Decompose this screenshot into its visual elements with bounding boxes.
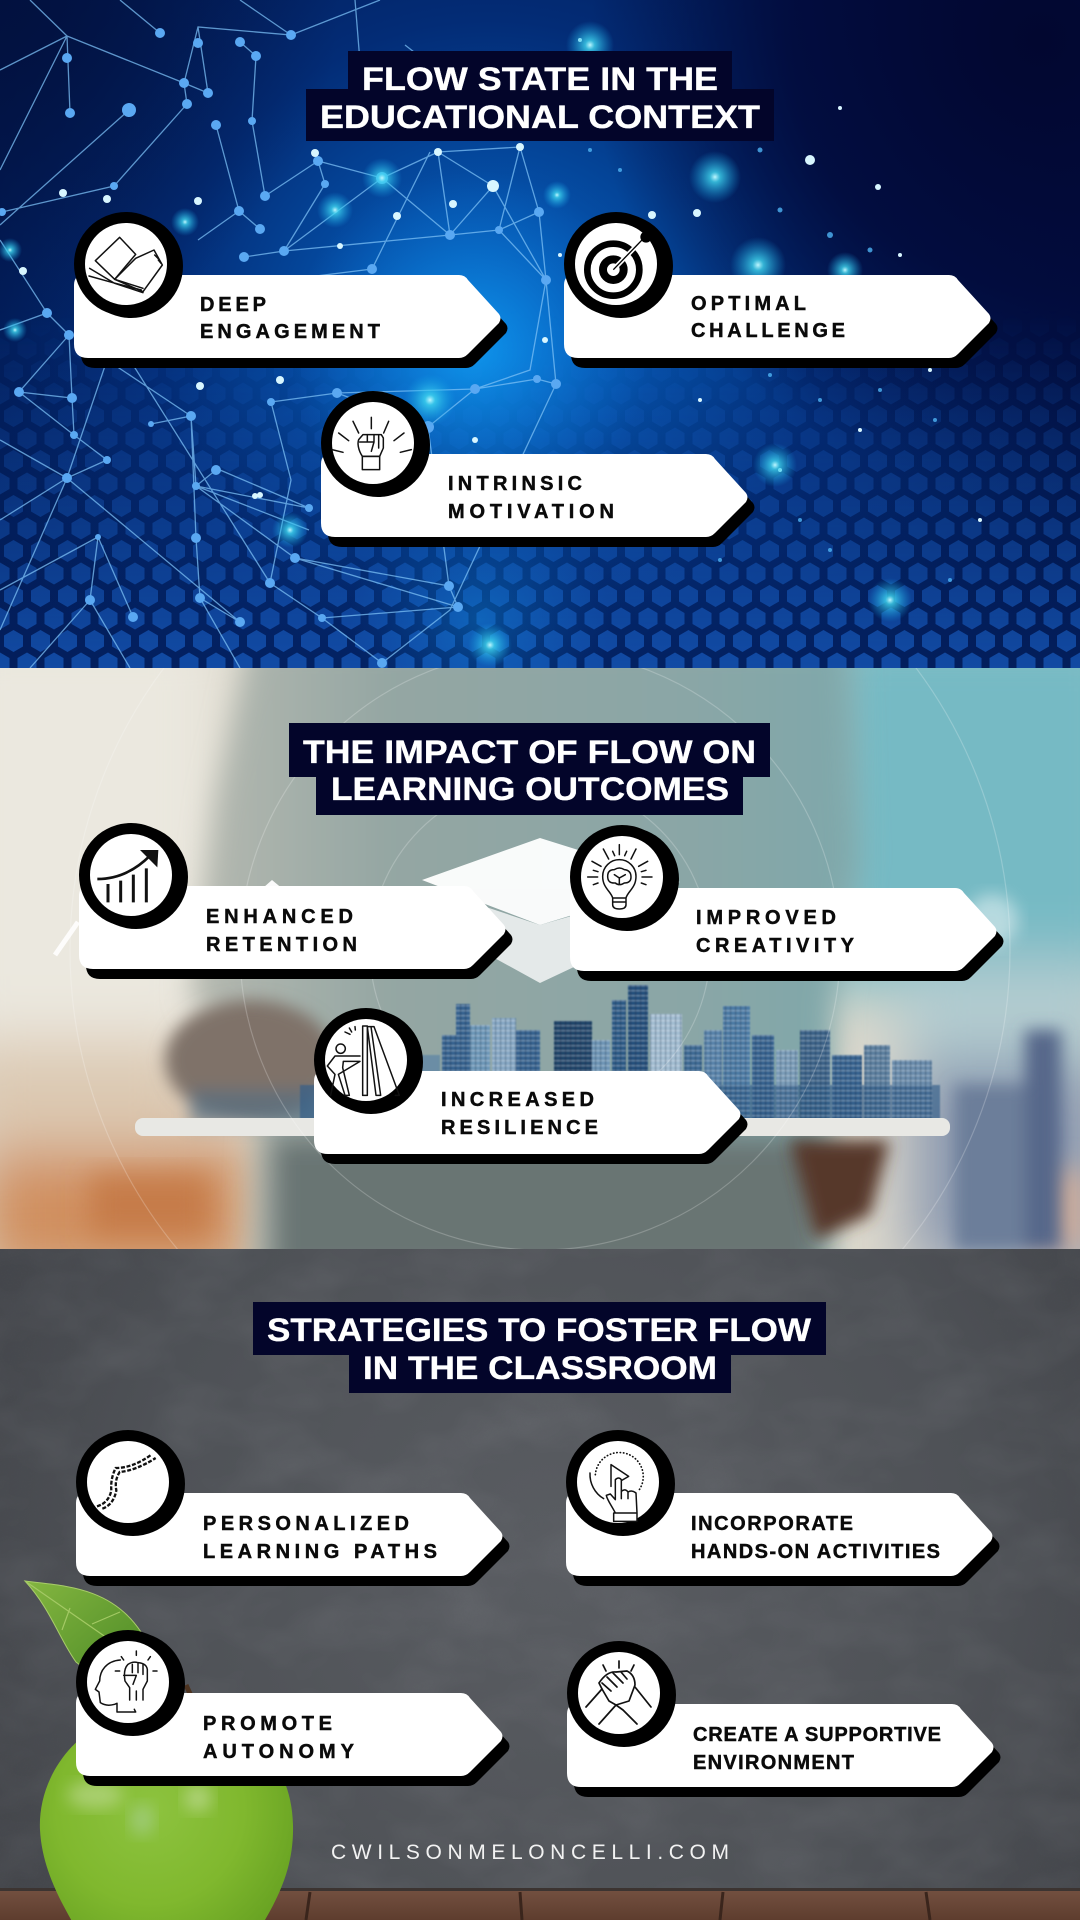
icon: hand tapping play button	[590, 1453, 643, 1521]
label	[691, 1513, 940, 1563]
icon: book	[89, 237, 162, 293]
label: LEARNING PATHS	[203, 1541, 437, 1563]
label: INTRINSIC	[448, 473, 582, 495]
icon: clasped hands	[586, 1661, 651, 1724]
title: strategies: STRATEGIES TO FOSTER FLOW	[267, 1312, 812, 1348]
label: ENVIRONMENT	[693, 1752, 854, 1774]
label	[693, 1724, 941, 1774]
label: PROMOTE	[203, 1713, 332, 1735]
label: RETENTION	[206, 934, 357, 956]
label: IMPROVED	[696, 907, 836, 929]
panel: flow state background	[0, 0, 1080, 668]
label: INCORPORATE	[691, 1513, 853, 1535]
card: deep engagement	[74, 212, 508, 368]
card: optimal challenge	[564, 212, 998, 368]
panel: impact of flow background	[0, 668, 1080, 1249]
card: increased resilience	[314, 1008, 748, 1164]
city skyline	[300, 985, 940, 1125]
card: promote autonomy	[76, 1630, 510, 1786]
icon: light bulb with brain	[588, 845, 652, 909]
card: supportive environment	[567, 1641, 1000, 1797]
wood shelf	[0, 1888, 1080, 1920]
label: CREATIVITY	[696, 935, 855, 957]
footer url: CWILSONMELONCELLI.COM	[331, 1841, 729, 1864]
label	[691, 293, 845, 342]
label: AUTONOMY	[203, 1741, 355, 1763]
tablet	[135, 1118, 950, 1136]
label: INCREASED	[441, 1089, 594, 1111]
label: PERSONALIZED	[203, 1513, 409, 1535]
apple	[40, 1685, 293, 1920]
card: hands-on activities	[566, 1430, 1000, 1586]
title: strategies	[253, 1302, 826, 1393]
panel: strategies background	[0, 1249, 1080, 1920]
label: DEEP	[200, 294, 266, 316]
label	[441, 1089, 598, 1139]
label: ENGAGEMENT	[200, 321, 380, 343]
title: impact of flow: LEARNING OUTCOMES	[331, 771, 729, 807]
icon: head with raised fist	[95, 1651, 157, 1712]
graduation cap	[255, 838, 680, 983]
label	[203, 1713, 355, 1763]
label: MOTIVATION	[448, 501, 614, 523]
icon: growth chart	[97, 850, 158, 902]
small blue particles	[588, 148, 952, 582]
label: CHALLENGE	[691, 320, 845, 342]
title: flow state: EDUCATIONAL CONTEXT	[320, 99, 761, 135]
network lines	[0, 0, 556, 668]
title: flow state: FLOW STATE IN THE	[362, 61, 718, 97]
title: impact of flow: THE IMPACT OF FLOW ON	[303, 734, 756, 770]
title: impact of flow	[289, 723, 770, 815]
card: improved creativity	[570, 825, 1004, 981]
title: strategies: IN THE CLASSROOM	[363, 1350, 717, 1386]
label: RESILIENCE	[441, 1117, 598, 1139]
label	[206, 906, 357, 956]
apple leaf	[24, 1580, 142, 1665]
icon: person pushing wall	[327, 1026, 399, 1095]
label: CREATE A SUPPORTIVE	[693, 1724, 941, 1746]
label	[200, 294, 380, 343]
icon: raised fist	[332, 417, 411, 470]
label	[448, 473, 614, 523]
icon: footstep path	[97, 1455, 156, 1509]
network nodes	[0, 28, 561, 668]
card: intrinsic motivation	[321, 391, 754, 547]
label	[696, 907, 855, 957]
title: flow state	[306, 51, 774, 141]
icon: target	[587, 231, 652, 296]
label: ENHANCED	[206, 906, 353, 928]
card: enhanced retention	[79, 823, 512, 979]
label: OPTIMAL	[691, 293, 806, 315]
label: HANDS-ON ACTIVITIES	[691, 1541, 940, 1563]
light particles	[19, 38, 982, 522]
label	[203, 1513, 437, 1563]
card: personalized learning paths	[76, 1430, 510, 1586]
